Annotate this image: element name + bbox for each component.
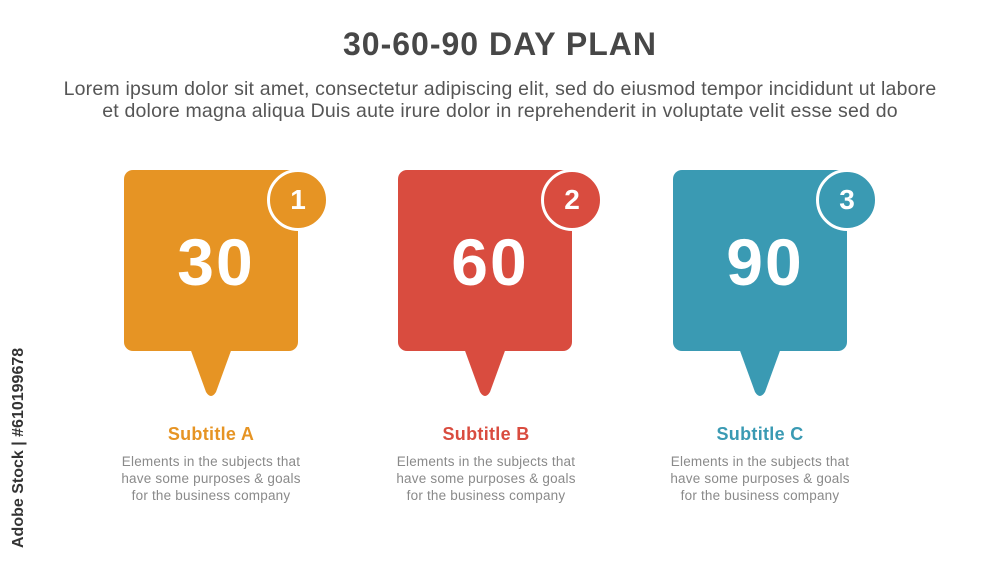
pin box teal [673, 170, 847, 351]
title: 30-60-90 DAY PLAN [343, 26, 657, 62]
pin tail teal [740, 351, 780, 396]
description C: Elements in the subjects that [671, 454, 849, 469]
subtitle C: Subtitle C [716, 424, 804, 444]
pin box red [398, 170, 572, 351]
badge 3: 3 [839, 184, 855, 215]
description B [396, 454, 576, 503]
description B: for the business company [407, 488, 565, 503]
description A [121, 454, 301, 503]
number 90: 90 [726, 225, 804, 299]
card: 30 [124, 170, 326, 396]
pin box orange [124, 170, 298, 351]
subtitle A: Subtitle A [168, 424, 254, 444]
intro text [64, 78, 936, 122]
number 60: 60 [451, 225, 529, 299]
intro text: et dolore magna aliqua Duis aute irure dolor in reprehenderit in voluptate velit esse sed do [102, 100, 898, 122]
pin tail orange [191, 351, 231, 396]
description C: for the business company [681, 488, 839, 503]
badge 2: 2 [564, 184, 580, 215]
description A: have some purposes & goals [121, 471, 301, 486]
card: 90 [673, 170, 875, 396]
badge 2 [541, 169, 603, 231]
description C [670, 454, 850, 503]
intro text: Lorem ipsum dolor sit amet, consectetur adipiscing elit, sed do eiusmod tempor incididunt ut labore [64, 78, 936, 100]
number 30: 30 [177, 225, 255, 299]
pin tail red [465, 351, 505, 396]
badge 1 [267, 169, 329, 231]
card: 60 [398, 170, 600, 396]
description A: for the business company [132, 488, 290, 503]
watermark: Adobe Stock | #610199678 [10, 348, 27, 548]
badge 1: 1 [290, 184, 306, 215]
description B: Elements in the subjects that [397, 454, 575, 469]
description A: Elements in the subjects that [122, 454, 300, 469]
badge 3 [816, 169, 878, 231]
subtitle B: Subtitle B [442, 424, 530, 444]
description B: have some purposes & goals [396, 471, 576, 486]
description C: have some purposes & goals [670, 471, 850, 486]
